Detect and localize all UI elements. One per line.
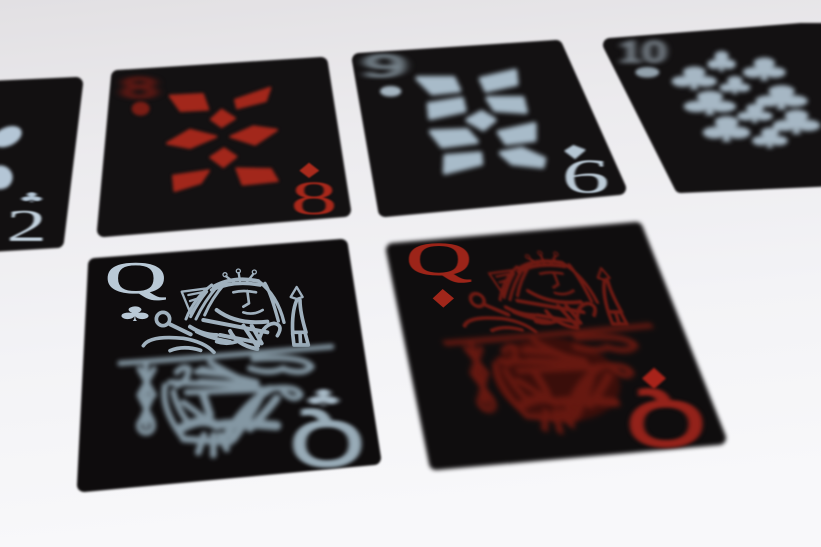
index suit: top diamond (433, 289, 454, 308)
index: number 2: 2 (6, 202, 47, 251)
card: partial two of clubs at left (0, 84, 76, 251)
pips: ten clubs: ♣ (748, 124, 792, 154)
index suit: blurred top club (380, 86, 401, 97)
index suit: blurred top diamond (132, 102, 150, 116)
index: blurred top 10: 10 (618, 34, 666, 69)
pips: ten clubs: ♣ (677, 86, 743, 122)
index suit: small diamond (299, 163, 319, 178)
pips: ten clubs: ♣ (733, 100, 777, 129)
index: bottom 8: 8 (290, 172, 338, 225)
pips: ten clubs: ♣ (749, 80, 815, 117)
index: top letter Q: Q (105, 253, 167, 302)
illustration: queen lower half (120, 347, 332, 455)
card: ten of clubs (610, 30, 821, 186)
illustration: queen upper half (143, 269, 308, 352)
pip: club fragment upper (0, 122, 25, 152)
index: bottom letter Q rotated: Q (627, 388, 705, 460)
index: blurred top 9: 9 (364, 48, 406, 84)
index: bottom letter Q rotated: Q (290, 407, 364, 479)
index: blurred top 8: 8 (121, 70, 158, 104)
pips: nine clubs (418, 71, 544, 172)
index suit: small club (565, 146, 585, 158)
pips: ten clubs: ♣ (716, 73, 754, 99)
pip: club fragment lower (0, 165, 13, 189)
index: bottom 6: 6 (562, 149, 610, 203)
index suit: bottom diamond (642, 368, 666, 389)
card: nine of clubs (359, 47, 619, 210)
illustration: queen upper half (446, 251, 629, 332)
illustration: queen lower half (442, 326, 677, 432)
card: eight of diamonds (104, 64, 344, 230)
pips: ten clubs: ♣ (737, 53, 791, 88)
pips: ten clubs (666, 47, 821, 154)
index suit: top club: ♣ (117, 303, 153, 326)
pips: ten clubs: ♣ (704, 47, 740, 78)
index suit: small club: ♣ (18, 190, 45, 206)
index suit: bottom club: ♣ (303, 384, 344, 413)
pips: eight diamonds (167, 88, 277, 191)
card: queen of clubs (84, 246, 374, 485)
index: top letter Q: Q (406, 233, 472, 285)
index suit: blurred top club (635, 67, 659, 78)
card: queen of diamonds (393, 229, 719, 463)
pips: ten clubs: ♣ (666, 61, 723, 96)
illustration: queen underglow (484, 337, 630, 422)
pips: ten clubs: ♣ (697, 111, 757, 149)
